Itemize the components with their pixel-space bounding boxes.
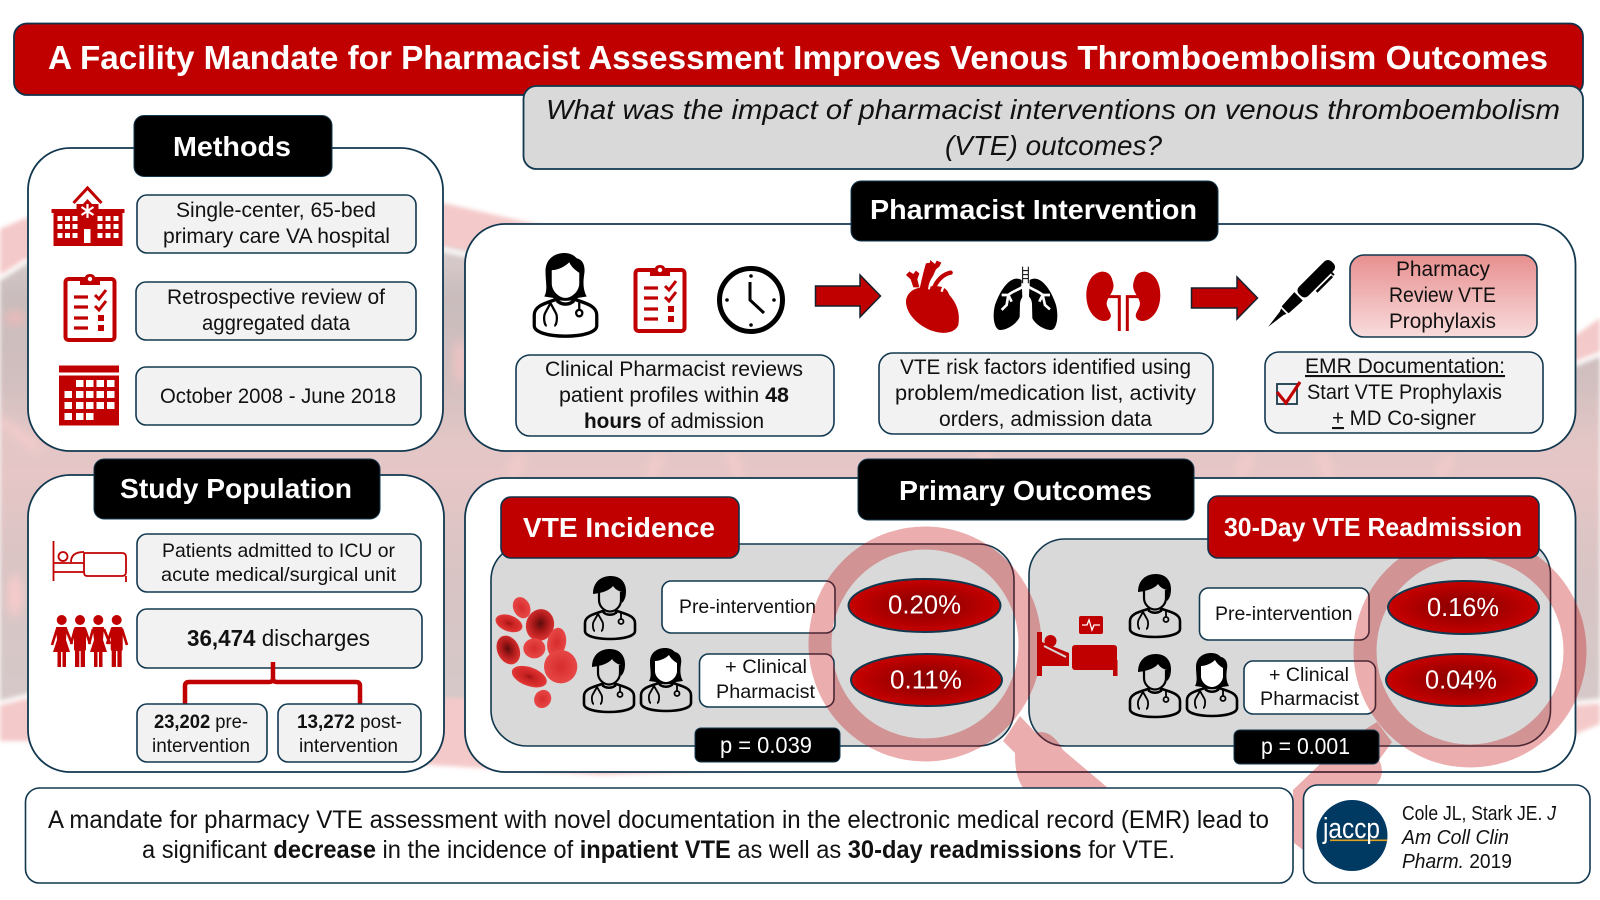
bracket — [185, 662, 360, 704]
icon: kidneys — [1086, 272, 1160, 331]
label: plus clinical pharmacist: Pharmacist — [1260, 688, 1360, 710]
research question — [524, 86, 1583, 169]
rate: post-intervention readmission — [1386, 654, 1537, 706]
label: plus clinical pharmacist: + Clinical — [1269, 664, 1349, 686]
text box: post-intervention count: intervention — [299, 735, 398, 757]
icon: physician — [1130, 574, 1180, 637]
p value: VTE incidence: p = 0.039 — [720, 732, 812, 758]
text box: risk factors — [879, 353, 1213, 434]
heading: primary outcomes — [858, 459, 1194, 520]
rate: pre-intervention readmission: 0.16% — [1427, 592, 1499, 622]
text box: setting — [137, 195, 416, 253]
text box: dates: October 2008 - June 2018 — [160, 385, 396, 408]
text box: patients — [137, 534, 421, 592]
text box: risk factors: problem/medication list, activity — [895, 382, 1197, 405]
citation: Am Coll Clin — [1401, 827, 1509, 849]
logo: jaccp — [1316, 800, 1388, 871]
text box: EMR documentation: Start VTE Prophylaxis — [1307, 381, 1502, 404]
label: plus clinical pharmacist: Pharmacist — [716, 681, 816, 703]
text box: clinical pharmacist review — [516, 355, 834, 436]
icon: clock — [720, 268, 782, 332]
icon: group of people — [52, 615, 127, 667]
tab: VTE incidence — [501, 497, 739, 558]
text box: design — [136, 282, 416, 340]
label: pre-intervention: Pre-intervention — [679, 596, 816, 618]
label: pre-intervention — [1200, 588, 1369, 640]
text box: setting: primary care VA hospital — [163, 225, 390, 248]
callout: pharmacy review: Prophylaxis — [1389, 310, 1496, 333]
magnifier overlay: VTE incidence — [820, 538, 1108, 788]
label: plus clinical pharmacist: + Clinical — [725, 656, 807, 678]
conclusion: A mandate for pharmacy VTE assessment with novel documentation in the electronic medical record (EMR) lead to — [48, 806, 1269, 834]
text box: post-intervention count — [278, 704, 421, 762]
text box: design: Retrospective review of — [167, 286, 385, 309]
rate: pre-intervention readmission — [1388, 581, 1539, 634]
rate: post-intervention VTE — [851, 654, 1002, 706]
citation: Pharm. 2019 — [1402, 851, 1512, 873]
icon: physician and pharmacist — [1130, 653, 1237, 717]
callout: pharmacy review: Pharmacy — [1396, 258, 1490, 281]
text box: risk factors: VTE risk factors identified using — [900, 356, 1191, 379]
tab: VTE incidence: VTE Incidence — [523, 512, 715, 543]
label: plus clinical pharmacist — [1244, 661, 1376, 714]
text box: EMR documentation — [1265, 352, 1543, 433]
icon: physician — [585, 576, 635, 639]
heading: pharmacist intervention — [851, 181, 1218, 241]
text box: discharges: 36,474 discharges — [187, 625, 370, 651]
label: plus clinical pharmacist — [700, 654, 834, 707]
icon: physician and pharmacist — [584, 648, 691, 712]
icon: hospital — [52, 188, 124, 246]
panel: primary outcomes — [465, 459, 1576, 850]
icon: hospital bed outline — [54, 541, 126, 582]
icon: female pharmacist — [534, 253, 597, 336]
icon: clipboard — [636, 265, 684, 331]
callout: pharmacy review — [1350, 255, 1537, 337]
icon: patient in bed with monitor — [1037, 616, 1118, 676]
panel: methods — [28, 116, 443, 451]
p value: VTE incidence — [695, 728, 840, 762]
text box: clinical pharmacist review: Clinical Pharmacist reviews — [545, 358, 803, 381]
label: pre-intervention: Pre-intervention — [1215, 603, 1352, 625]
label: pre-intervention — [662, 581, 835, 633]
text box: pre-intervention count: 23,202 pre- — [154, 711, 248, 733]
icon: clipboard — [66, 274, 114, 340]
text box: pre-intervention count — [137, 704, 267, 762]
text box: patients: Patients admitted to ICU or — [162, 540, 395, 562]
icon: heart — [906, 260, 959, 333]
text box: pre-intervention count: intervention — [152, 735, 250, 757]
text box: EMR documentation: + MD Co-signer — [1332, 407, 1476, 430]
heading: study population: Study Population — [120, 473, 352, 504]
text box: post-intervention count: 13,272 post- — [297, 711, 402, 733]
citation — [1304, 785, 1590, 883]
heading: methods — [134, 116, 332, 176]
icon: pen — [1264, 258, 1340, 334]
text box: clinical pharmacist review: hours of admission — [584, 410, 764, 433]
rate: pre-intervention VTE — [848, 579, 1000, 632]
magnifier overlay: readmission — [1293, 546, 1575, 850]
text box: patients: acute medical/surgical unit — [161, 564, 397, 586]
icon: lungs — [994, 267, 1057, 332]
conclusion: a significant decrease in the incidence of inpatient VTE as well as 30-day readmissions for VTE. — [142, 836, 1175, 864]
icon: red blood cells — [492, 594, 583, 711]
research question: (VTE) outcomes? — [945, 130, 1163, 161]
logo: jaccp: jaccp — [1322, 813, 1380, 845]
rate: post-intervention readmission: 0.04% — [1425, 664, 1497, 694]
panel: pharmacist intervention — [465, 181, 1576, 451]
conclusion — [26, 788, 1293, 883]
text box: EMR documentation: EMR Documentation: — [1305, 355, 1505, 378]
rate: pre-intervention VTE: 0.20% — [888, 590, 961, 620]
heading: pharmacist intervention: Pharmacist Intervention — [870, 194, 1197, 225]
text box: discharges — [137, 609, 422, 668]
p value: readmission — [1234, 730, 1379, 764]
heading: methods: Methods — [173, 131, 291, 162]
sub-panel: VTE incidence — [491, 544, 1014, 746]
text box: design: aggregated data — [202, 312, 350, 335]
arrow — [816, 275, 880, 317]
arrow — [1192, 277, 1258, 319]
background: blurred blood vessel — [0, 203, 1600, 775]
title banner — [14, 24, 1583, 95]
tab: readmission — [1208, 496, 1539, 558]
citation: Cole JL, Stark JE. J — [1402, 803, 1557, 825]
research question: What was the impact of pharmacist interventions on venous thromboembolism — [546, 94, 1560, 125]
text box: risk factors: orders, admission data — [939, 408, 1152, 431]
icon: calendar — [59, 366, 119, 426]
tab: readmission: 30-Day VTE Readmission — [1224, 512, 1522, 542]
text box: setting: Single-center, 65-bed — [176, 199, 376, 222]
callout: pharmacy review: Review VTE — [1389, 284, 1496, 307]
rate: post-intervention VTE: 0.11% — [890, 664, 962, 694]
heading: primary outcomes: Primary Outcomes — [899, 475, 1152, 506]
text box: dates — [136, 367, 421, 425]
p value: readmission: p = 0.001 — [1261, 733, 1350, 759]
heading: study population — [94, 459, 380, 519]
sub-panel: readmission — [1029, 539, 1550, 746]
text box: clinical pharmacist review: patient profiles within 48 — [559, 384, 789, 407]
title banner: A Facility Mandate for Pharmacist Assessment Improves Venous Thromboembolism Outcomes — [48, 39, 1548, 76]
panel: study population — [28, 459, 444, 772]
